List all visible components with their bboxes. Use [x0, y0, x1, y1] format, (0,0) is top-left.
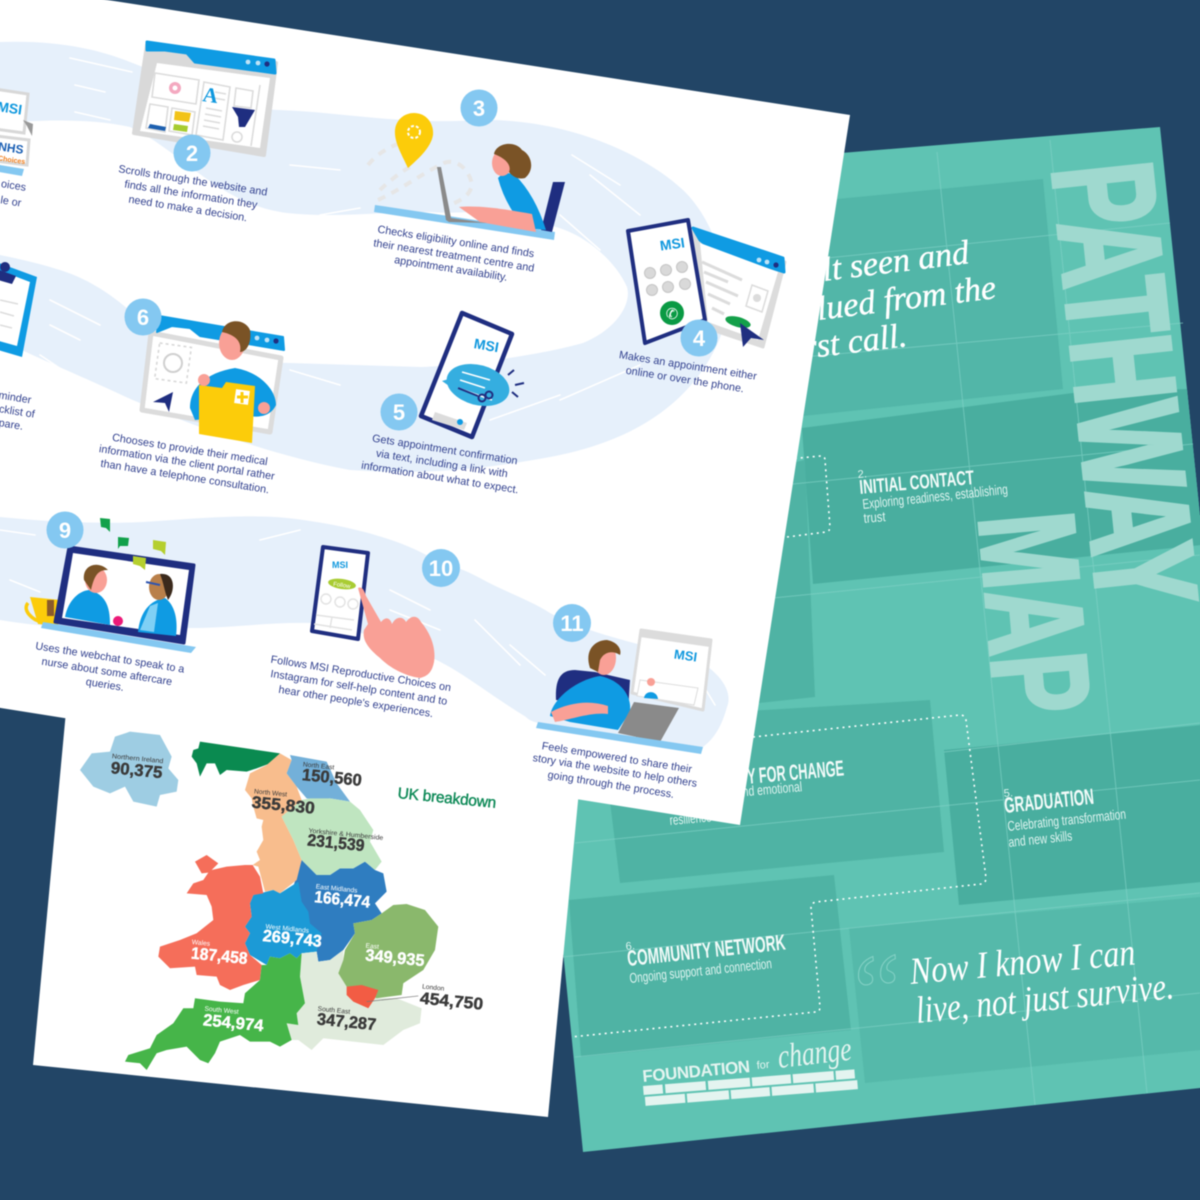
step 10 number [422, 549, 460, 587]
step 3 number [460, 90, 498, 126]
label: North West 355,830: 355,830 [251, 793, 316, 818]
step 8: partial clipboard [0, 259, 37, 357]
step 2 caption: Scrolls through the website and [118, 163, 268, 199]
region: London [347, 985, 378, 1008]
step 11 caption: story via the website to help others [532, 752, 698, 790]
step 4: phone and booking window: ✆ [666, 305, 678, 323]
step 3 caption: Checks eligibility online and finds [377, 224, 536, 260]
label: South West 254,974: South West [204, 1006, 239, 1016]
logo: foundation for change: FOUNDATION [642, 1057, 751, 1086]
step 5 caption [360, 433, 519, 496]
step 3 caption: their nearest treatment centre and [373, 237, 535, 275]
step 4 caption: Makes an appointment either [618, 349, 758, 383]
logo: foundation for change [642, 1031, 858, 1106]
step 10: phone and pointing hand: MSI [332, 560, 348, 570]
label: Wales 187,458: 187,458 [190, 944, 248, 968]
logo: foundation for change: change [776, 1031, 853, 1076]
text block: initial contact: INITIAL CONTACT [859, 467, 975, 499]
step 4: phone and booking window [628, 220, 785, 347]
text block: initial contact: 2. [857, 468, 867, 481]
step 4: phone and booking window: MSI [659, 234, 686, 254]
region: East [338, 904, 438, 998]
label: East Midlands 166,474: 166,474 [313, 887, 372, 912]
step 11 caption [532, 740, 698, 801]
step 10: phone and pointing hand [312, 547, 434, 678]
step 2 number [174, 134, 210, 172]
step 10: phone and pointing hand: Follow [333, 582, 351, 590]
step 5: phone with text message [421, 313, 524, 437]
label: Yorkshire and Humberside 231,539: Yorkshire & Humberside [308, 828, 384, 842]
step 6 caption: information via the client portal rather [98, 443, 276, 483]
step 2: browser window: A [201, 82, 220, 108]
step 1 caption: oices [0, 178, 28, 194]
region: Northern Ireland [80, 732, 178, 807]
chart: UK regional map [80, 732, 484, 1070]
quote: now I know I can [907, 931, 1176, 1032]
step 3 caption: appointment availability. [393, 254, 508, 284]
quote mark: “ [850, 931, 908, 1054]
panel: patient journey sheet [0, 0, 850, 825]
step 5 number: 5 [393, 400, 405, 425]
step 3: person at laptop with location pin [368, 113, 565, 240]
label: South East 347,287: South East [317, 1006, 351, 1016]
label: West Midlands 269,743: West Midlands [265, 923, 310, 935]
region: Wales [158, 855, 263, 990]
step 4 number: 4 [693, 326, 706, 351]
step 4 number [680, 320, 718, 356]
quote: felt seen and valued: first call. [783, 317, 909, 369]
step 5 caption: Gets appointment confirmation [371, 433, 518, 467]
heading: UK breakdown: UK breakdown [397, 785, 497, 812]
step 2: browser window [134, 42, 276, 155]
step 9 caption [35, 640, 185, 694]
step 9 caption: Uses the webchat to speak to a [35, 640, 185, 676]
step 11 number [553, 604, 591, 642]
label: East 349,935: East [365, 943, 379, 951]
step 2 number: 2 [186, 141, 198, 166]
label: Northern Ireland 90,375: 90,375 [110, 758, 163, 782]
label: South West 254,974: 254,974 [202, 1010, 265, 1035]
label: West Midlands 269,743: 269,743 [262, 926, 323, 951]
step 11: person sharing story: MSI [673, 647, 698, 665]
label: London 454,750: 454,750 [419, 989, 484, 1014]
step 6 caption: Chooses to provide their medical [111, 432, 268, 468]
step 1 caption: le or [0, 194, 23, 210]
step 9 caption: queries. [85, 676, 125, 694]
region: South East [287, 950, 422, 1050]
quote: felt seen and valued: valued from the [783, 269, 998, 332]
region: East Midlands [293, 860, 387, 962]
step 6 number [124, 298, 162, 336]
step 8 caption [0, 389, 37, 433]
journey path band: upper loop [0, 42, 726, 472]
step 9 number: 9 [59, 518, 71, 543]
text block: community network: COMMUNITY NETWORK [626, 929, 787, 971]
panel: teal pathway map poster [558, 127, 1200, 1152]
label: South East 347,287: 347,287 [316, 1009, 377, 1034]
label: Yorkshire and Humberside 231,539: 231,539 [306, 831, 365, 855]
step 2 caption: need to make a decision. [128, 194, 248, 224]
step 6: person with folder at browser window [142, 316, 284, 443]
step 6 caption [98, 432, 276, 496]
step 1 caption [0, 178, 28, 210]
region: North West [245, 753, 302, 893]
quote: felt seen and valued [775, 234, 998, 369]
step 11 caption: Feels empowered to share their [541, 740, 693, 776]
region: Scotland [192, 742, 280, 777]
panel: UK map sheet [33, 690, 580, 1117]
step 10 caption: Instagram for self-help content and to [270, 668, 448, 708]
journey path band: lower sweep [0, 516, 729, 747]
step 9 caption: nurse about some aftercare [41, 656, 173, 688]
step 5 caption: information about what to expect. [360, 460, 519, 496]
text block: ready for change [655, 755, 845, 828]
step 9: laptop video chat [26, 518, 196, 653]
step 6 caption: than have a telephone consultation. [100, 458, 270, 496]
text block: ready for change: Building practical and emotional [655, 778, 803, 807]
text block: ready for change: READY FOR CHANGE [710, 755, 845, 792]
label: East Midlands 166,474: East Midlands [315, 884, 358, 895]
text block: community network: 6. [625, 940, 635, 953]
motion streaks [0, 58, 715, 705]
quote: now I know I can: Now I know I can [907, 931, 1137, 993]
region: West Midlands [245, 882, 322, 965]
step 5: phone with text message: MSI [473, 335, 500, 355]
step 11 caption: going through the process. [547, 769, 675, 801]
step 6 number: 6 [137, 305, 149, 330]
leader line: London [367, 996, 418, 1002]
label: Wales 187,458: Wales [191, 939, 211, 948]
label: Northern Ireland 90,375: Northern Ireland [112, 753, 164, 765]
label: North East 150,560: 150,560 [301, 765, 363, 790]
text block: graduation: and new skills [1008, 827, 1073, 850]
label: North West 355,830: North West [254, 788, 288, 799]
step 9 number [46, 512, 84, 548]
heading: MAP: MAP [950, 506, 1119, 720]
quote: felt seen and valued: I felt seen and [775, 234, 972, 294]
dashed connector: step 2 [787, 456, 830, 537]
region: South West [125, 953, 305, 1070]
step 11 number: 11 [560, 611, 584, 636]
step 3 caption [373, 224, 536, 284]
step 10 caption [270, 654, 452, 720]
step 10 caption: Follows MSI Reproductive Choices on [270, 654, 452, 694]
logo: foundation for change: for [756, 1059, 770, 1072]
step 5 number [380, 394, 418, 430]
step 4 caption: online or over the phone. [625, 365, 745, 395]
label: North East 150,560: North East [303, 761, 335, 772]
text block: graduation [1003, 784, 1127, 850]
dashed connector: steps 4 to 6 [571, 715, 986, 1037]
step 3 number: 3 [473, 96, 485, 121]
region: Yorkshire and Humberside [282, 798, 382, 875]
text block: ready for change: resilience [669, 808, 712, 828]
step 2 caption [118, 163, 268, 224]
text block: community network [625, 929, 787, 986]
text block: initial contact [857, 467, 1009, 526]
text block: initial contact: trust [863, 508, 886, 526]
text block: community network: Ongoing support and connection [629, 955, 773, 986]
step 11: person sharing story [536, 630, 711, 754]
text block: graduation: 5. [1003, 787, 1013, 800]
text block: graduation: GRADUATION [1003, 784, 1095, 818]
step 10 number: 10 [429, 556, 453, 581]
text block: graduation: Celebrating transformation [1007, 806, 1127, 834]
text block: initial contact: Exploring readiness, establishing [862, 481, 1009, 512]
step 1: partial website cards [0, 88, 33, 176]
label: East 349,935: 349,935 [364, 945, 425, 970]
step 2 caption: finds all the information they [124, 179, 259, 212]
step 10 caption: hear other people's experiences. [278, 684, 434, 720]
step 5 caption: via text, including a link with [375, 448, 509, 480]
region: North East [287, 755, 350, 802]
label: London 454,750: London [422, 984, 445, 993]
